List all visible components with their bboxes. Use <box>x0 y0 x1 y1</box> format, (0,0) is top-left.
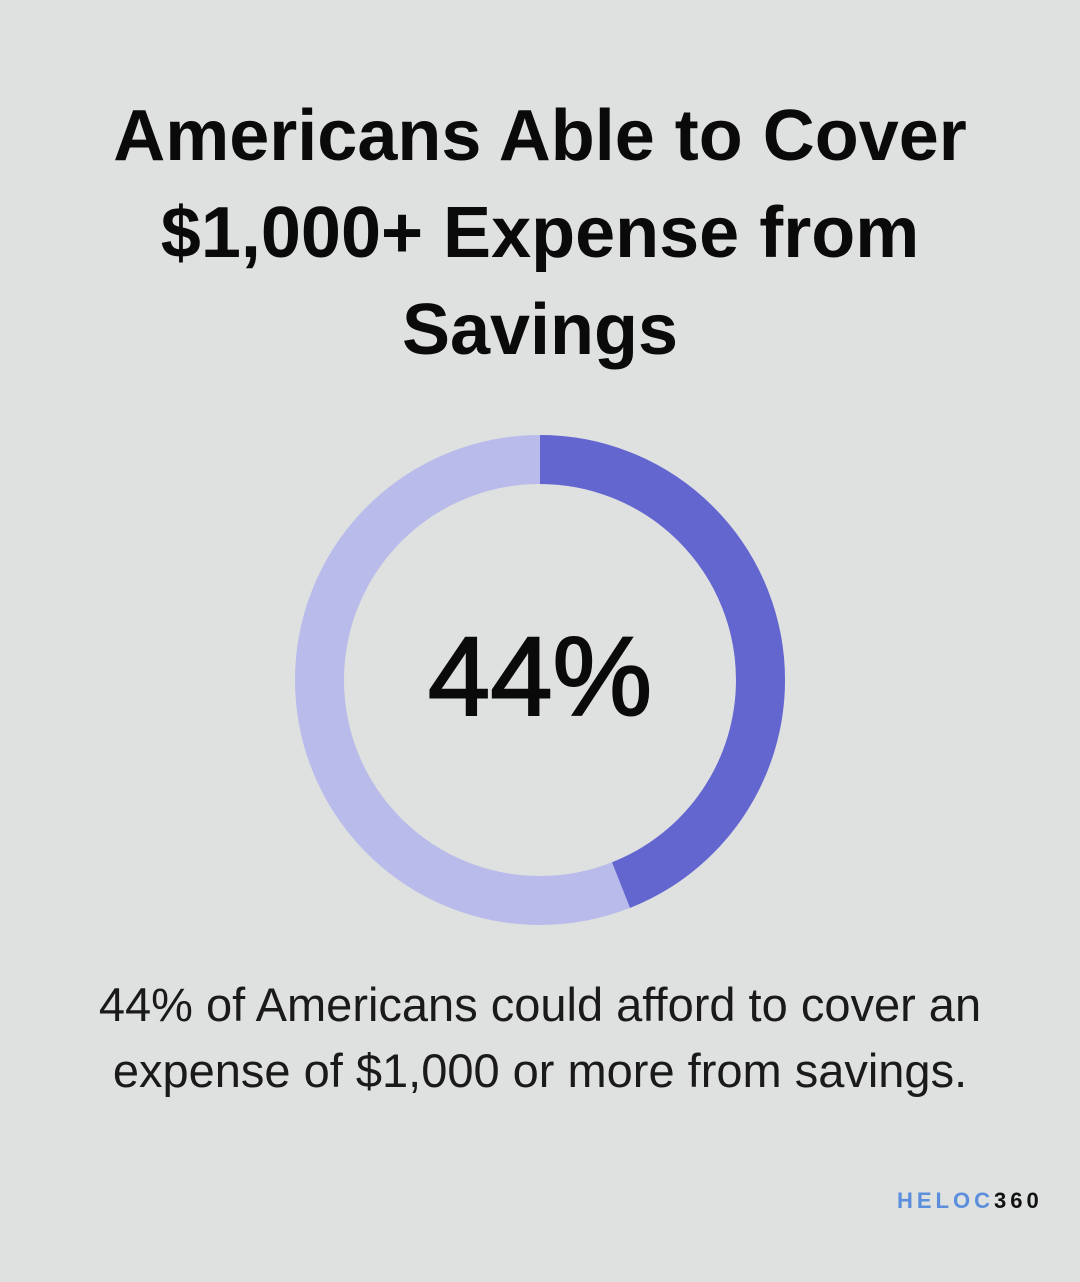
donut chart: 44% <box>428 614 652 739</box>
description <box>99 978 981 1097</box>
title: Savings <box>402 290 678 370</box>
description: 44% of Americans could afford to cover an <box>99 978 981 1031</box>
description: expense of $1,000 or more from savings. <box>113 1044 967 1097</box>
title <box>113 96 967 370</box>
title: $1,000+ Expense from <box>161 193 919 273</box>
logo: HELOC360 <box>897 1188 1043 1213</box>
title: Americans Able to Cover <box>113 96 967 176</box>
